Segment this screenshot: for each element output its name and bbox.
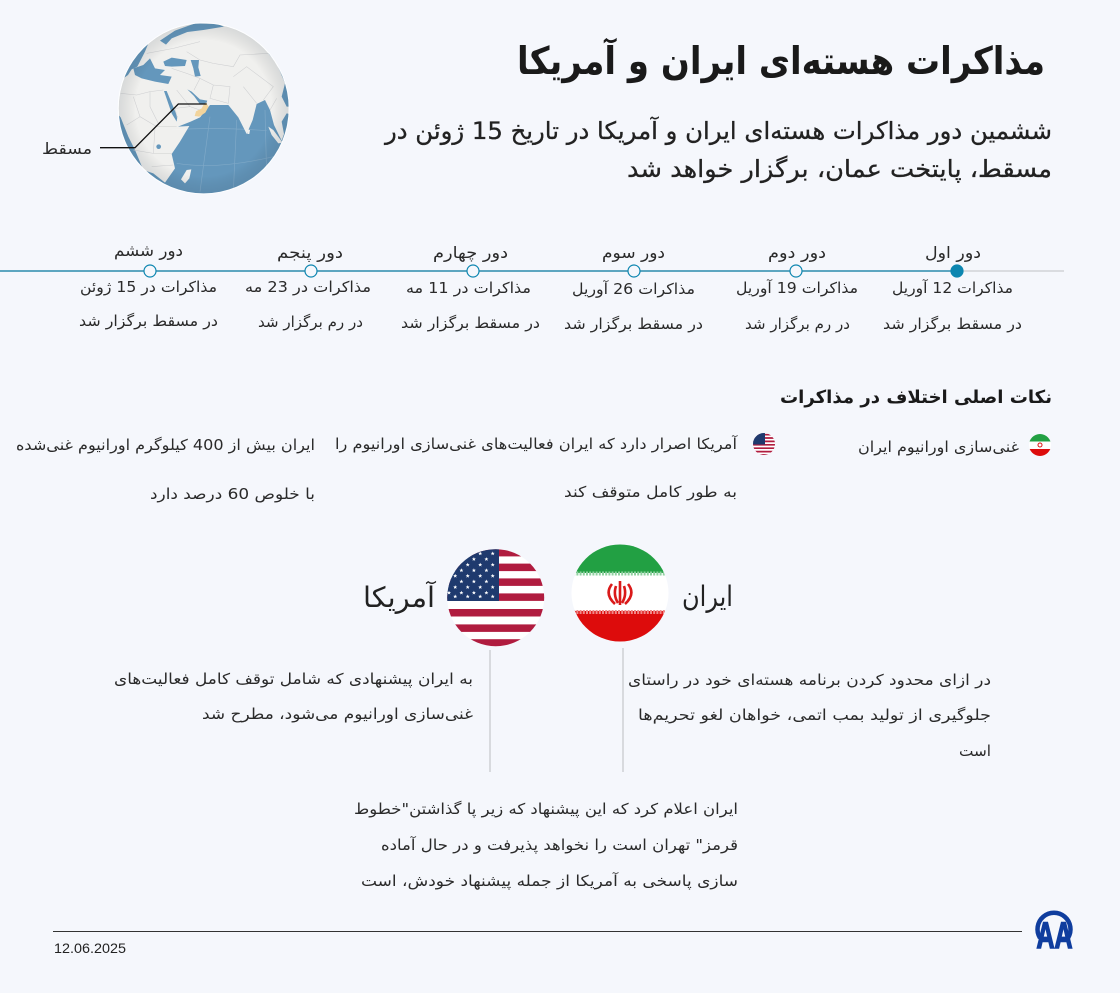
borders [121,42,277,167]
text: Iran response: ایران اعلام کرد که این پیشنهاد که زیر پا گذاشتن"خطوط [354,800,738,819]
emblem [609,581,631,605]
timeline round 3: دور سوم [602,243,665,263]
timeline round 4: در مسقط برگزار شد [401,314,540,332]
text: America proposal: به ایران پیشنهادی که شامل توقف کامل فعالیت‌های [114,670,473,689]
text: US position on enrichment: آمریکا اصرار دارد که ایران فعالیت‌های غنی‌سازی اورانیوم را [335,435,738,453]
subtitle: مسقط، پایتخت عمان، برگزار خواهد شد [627,155,1052,183]
logo: Anadolu Agency: AA [1036,915,1072,956]
text: Iran enriched uranium stockpile [16,436,315,503]
title: مذاکرات هسته‌ای ایران و آمریکا [517,37,1045,84]
subtitle [384,116,1052,183]
timeline round 5 [245,243,371,331]
timeline round 2 [736,243,858,333]
timeline round 6: در مسقط برگزار شد [79,312,218,330]
islands [181,169,191,183]
text: Iran demand: است [959,742,991,760]
timeline round 2: در رم برگزار شد [745,315,850,333]
timeline round 2: دور دوم [768,243,826,263]
timeline round 4: دور چهارم [433,243,508,263]
footer rule [53,930,1022,932]
icon: small US flag [753,433,775,455]
timeline round 5: دور پنجم [277,243,343,263]
timeline round 5: در رم برگزار شد [258,313,363,331]
text: Iran response [354,800,738,891]
timeline round 1 [883,243,1022,333]
text: US position on enrichment: به طور کامل متوقف کند [564,483,737,501]
text: Iran demand: در ازای محدود کردن برنامه هسته‌ای خود در راستای [628,671,991,689]
graticule [172,110,273,192]
section heading: main disagreements: نکات اصلی اختلاف در مذاکرات [780,387,1052,408]
callout label: Muscat: مسقط [42,139,92,158]
timeline round 3: در مسقط برگزار شد [564,315,703,333]
timeline round 1: در مسقط برگزار شد [883,315,1022,333]
timeline [0,241,1064,333]
callout: Muscat leader line [100,104,207,148]
label: Iran uranium enrichment: غنی‌سازی اورانیوم ایران [858,438,1019,456]
timeline round 3 [564,243,703,333]
text: Iran response: قرمز" تهران است را نخواهد پذیرفت و در حال آماده [381,836,738,855]
Oman [195,103,209,117]
timeline round 2: مذاکرات 19 آوریل [736,279,858,297]
connector: Iran column [622,648,624,772]
timeline round 1: مذاکرات 12 آوریل [892,279,1013,297]
icon: US flag [447,549,545,647]
text: Iran enriched uranium stockpile: با خلوص 60 درصد دارد [150,485,315,503]
icon: Iran flag [570,544,670,643]
label: America: آمریکا [363,581,436,614]
text: America proposal [114,670,473,723]
text: Iran enriched uranium stockpile: ایران بیش از 400 کیلوگرم اورانیوم غنی‌شده [16,436,315,454]
text: Iran response: سازی پاسخی به آمریکا از جمله پیشنهاد خودش، است [361,872,738,891]
timeline round 4 [401,243,540,332]
timeline axis [0,270,1064,272]
text: Iran demand: جلوگیری از تولید بمب اتمی، خواهان لغو تحریم‌ها [638,706,991,724]
timeline round 3: مذاکرات 26 آوریل [572,280,695,298]
globe map with Oman highlighted [118,24,288,194]
logo: Anadolu Agency [1036,913,1072,956]
timeline round 6: دور ششم [114,241,183,261]
land base [119,23,289,193]
text: US position on enrichment [335,435,738,501]
text: America proposal: غنی‌سازی اورانیوم می‌شود، مطرح شد [202,705,473,723]
ocean [119,100,288,194]
text: Iran demand [628,671,991,760]
date: 12.06.2025 [54,940,126,956]
connector: America column [489,650,491,772]
icon: small Iran flag [1029,434,1051,456]
timeline round 6: مذاکرات در 15 ژوئن [80,278,217,296]
timeline round 6 [79,241,218,330]
subtitle: ششمین دور مذاکرات هسته‌ای ایران و آمریکا در تاریخ 15 ژوئن در [384,116,1052,145]
timeline round 4: مذاکرات در 11 مه [406,279,531,297]
timeline round 5: مذاکرات در 23 مه [245,278,371,296]
timeline round 1: دور اول [925,243,981,263]
label: Iran: ایران [682,580,733,613]
